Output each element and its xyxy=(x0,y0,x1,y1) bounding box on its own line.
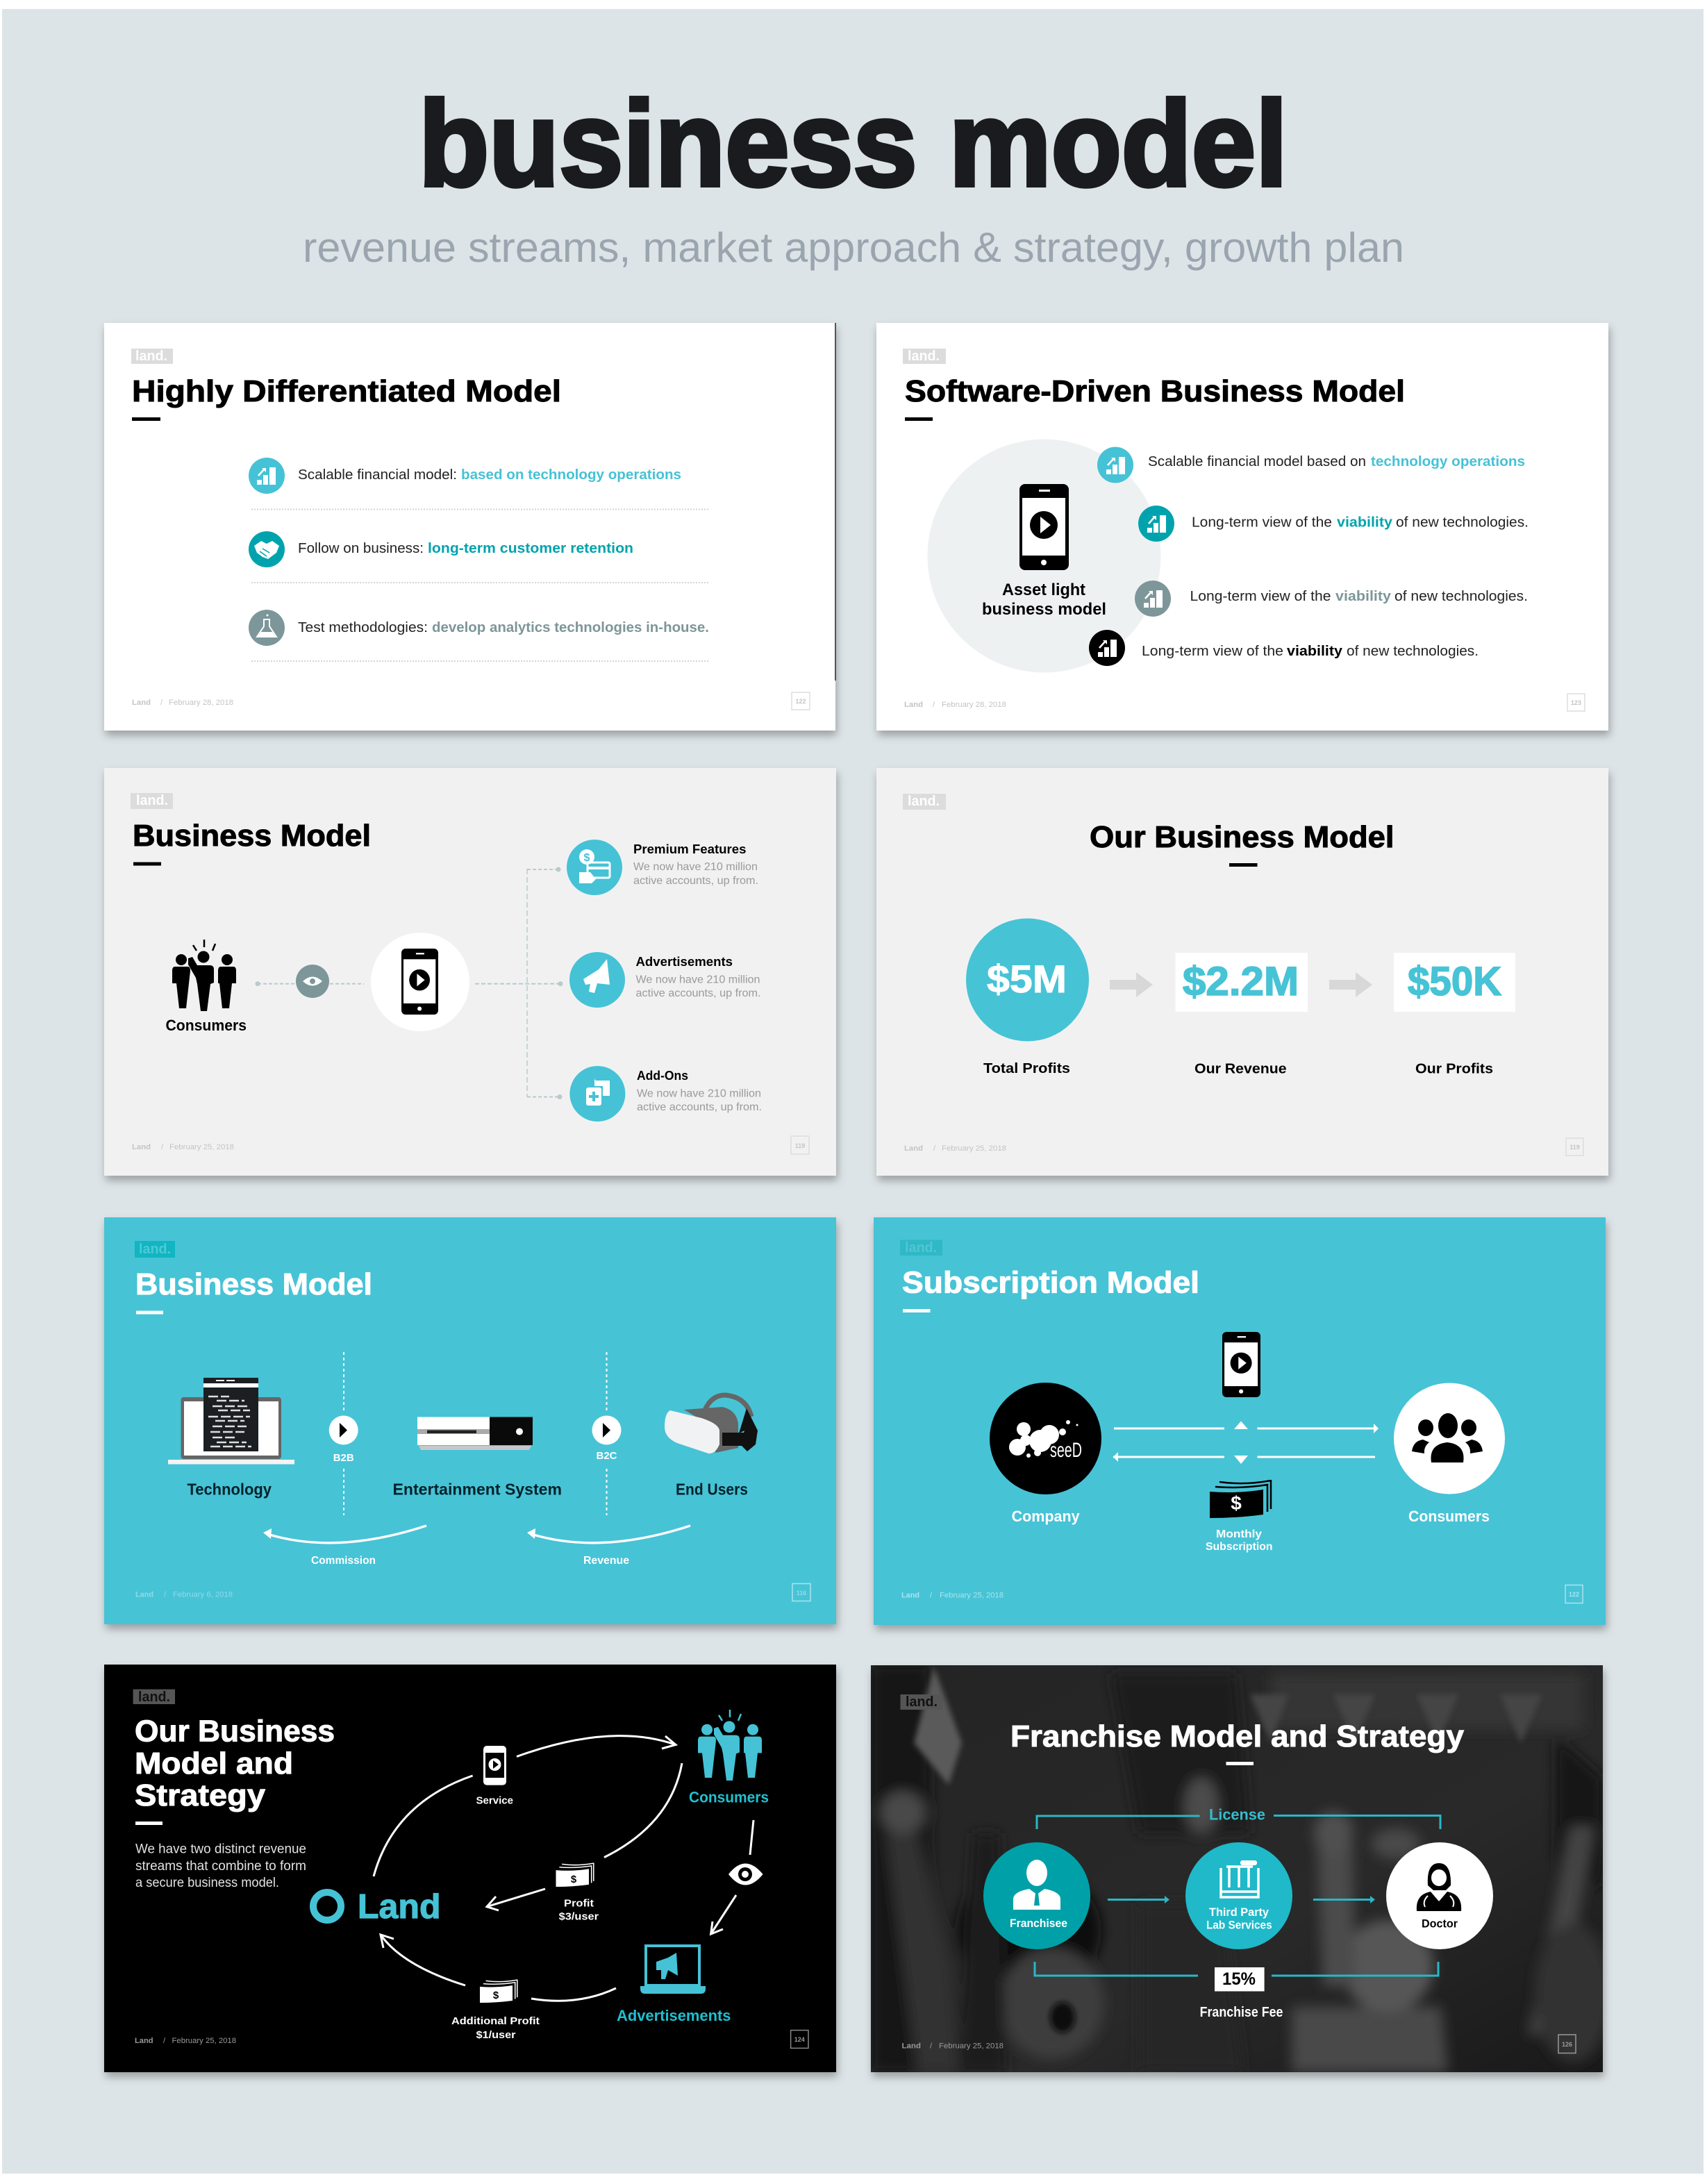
panel: Our Business Model and Strategy xyxy=(104,1665,836,2072)
B2C play: B2C xyxy=(596,1450,617,1462)
heading: Model and xyxy=(135,1747,293,1781)
footer: / xyxy=(164,1590,167,1599)
B2C play xyxy=(592,1415,621,1462)
profit xyxy=(556,1863,599,1923)
panel: Franchise Model and Strategy xyxy=(871,1665,1611,2072)
footer: 126 xyxy=(1562,2041,1572,2048)
profit: Profit xyxy=(564,1898,594,1910)
money icon: $ xyxy=(1231,1492,1242,1514)
add-ons: active accounts, up from. xyxy=(637,1101,762,1113)
item 1: Scalable financial model based on xyxy=(1148,454,1366,469)
arrow 1 xyxy=(1110,972,1153,997)
arrow franchisee to lab xyxy=(1108,1896,1169,1903)
B2B play: B2B xyxy=(333,1452,354,1464)
item 2: viability xyxy=(1337,515,1393,531)
labels: Entertainment System xyxy=(393,1480,562,1498)
heading: Our Business xyxy=(135,1715,335,1749)
consumers: Consumers xyxy=(165,1017,247,1034)
total profits: $5M xyxy=(987,957,1067,1001)
row 3: develop analytics technologies in-house. xyxy=(432,620,709,635)
background photo approximation xyxy=(871,1665,1611,2072)
footer xyxy=(904,1138,1583,1156)
revenue arrow: Revenue xyxy=(583,1555,629,1567)
item 2 xyxy=(1138,506,1529,542)
third party lab: Lab Services xyxy=(1206,1918,1272,1931)
doctor: Doctor xyxy=(1422,1917,1458,1930)
footer xyxy=(132,692,810,710)
Land logo: Land xyxy=(358,1888,440,1926)
consumers teal xyxy=(689,1710,769,1806)
premium features: active accounts, up from. xyxy=(633,875,758,887)
company: seeD xyxy=(1050,1439,1082,1462)
item 3: of new technologies. xyxy=(1394,589,1528,604)
advertisements: We now have 210 million xyxy=(636,974,760,985)
franchise fee label: Franchise Fee xyxy=(1200,2005,1283,2020)
license bracket xyxy=(1037,1806,1440,1829)
logo tag: land. xyxy=(908,794,940,809)
advertisements: Advertisements xyxy=(617,2007,731,2024)
row 1: based on technology operations xyxy=(461,467,681,483)
revenue: $2.2M xyxy=(1183,959,1299,1004)
premium features: We now have 210 million xyxy=(633,861,758,873)
commission arrow: Commission xyxy=(311,1555,376,1567)
footer: / xyxy=(930,1592,933,1600)
heading: Our Business Model xyxy=(1090,820,1394,854)
laptop icon xyxy=(168,1378,294,1464)
monthly subscription xyxy=(1206,1528,1272,1553)
heading: Highly Differentiated Model xyxy=(132,374,561,408)
heading: Business Model xyxy=(135,1267,372,1301)
monthly subscription: Subscription xyxy=(1206,1541,1272,1553)
15 percent box xyxy=(1215,1967,1265,1992)
eye xyxy=(728,1864,763,1885)
footer: February 25, 2018 xyxy=(940,1592,1004,1600)
heading: Franchise Model and Strategy xyxy=(1010,1719,1465,1753)
footer: 122 xyxy=(1569,1591,1579,1598)
row 2: long-term customer retention xyxy=(428,541,633,556)
B2B play xyxy=(329,1415,358,1464)
heading: Software-Driven Business Model xyxy=(905,374,1405,408)
eye icon xyxy=(296,965,329,998)
large circle xyxy=(928,439,1161,672)
footer: 123 xyxy=(1571,699,1581,706)
logo tag: land. xyxy=(139,1242,171,1257)
footer: February 25, 2018 xyxy=(172,2037,236,2045)
footer xyxy=(904,694,1585,711)
consumers teal: Consumers xyxy=(689,1789,769,1806)
dotted dividers xyxy=(344,1352,607,1515)
add-ons xyxy=(569,1066,762,1122)
item 4 xyxy=(1089,630,1479,666)
Land logo xyxy=(313,1888,440,1926)
logo tag: land. xyxy=(905,1240,937,1256)
footer: Land xyxy=(901,2042,921,2050)
logo tag: land. xyxy=(135,349,167,364)
consumers: Consumers xyxy=(1408,1508,1490,1525)
footer: / xyxy=(933,701,935,709)
center label: business model xyxy=(982,600,1106,619)
subtitle: revenue streams, market approach & strategy, growth plan xyxy=(303,224,1404,271)
profits xyxy=(1394,953,1515,1076)
add-ons: We now have 210 million xyxy=(637,1087,761,1100)
row 1: Scalable financial model: xyxy=(298,467,457,483)
row 2: Follow on business: xyxy=(298,541,424,556)
row 1 xyxy=(249,458,681,494)
arrow 2 xyxy=(1329,972,1372,997)
connector lines xyxy=(256,867,563,1099)
additional profit: $1/user xyxy=(476,2029,516,2041)
advertisements xyxy=(617,1946,731,2024)
panel: Business Model light grey xyxy=(104,768,836,1176)
logo tag: land. xyxy=(906,1694,938,1710)
profit: $ xyxy=(571,1874,577,1885)
service phone xyxy=(476,1746,513,1807)
footer: Land xyxy=(135,1590,153,1599)
third party lab: Third Party xyxy=(1209,1906,1269,1919)
footer: Land xyxy=(132,1143,151,1151)
row 3: Test methodologies: xyxy=(298,620,428,635)
title: business model xyxy=(419,76,1288,211)
license bracket: License xyxy=(1209,1806,1265,1823)
15 percent box: 15% xyxy=(1222,1969,1256,1989)
footer: / xyxy=(161,1143,164,1151)
monthly subscription: Monthly xyxy=(1216,1528,1262,1540)
footer: 116 xyxy=(797,1590,806,1597)
item 3: Long-term view of the xyxy=(1190,589,1331,604)
item 3: viability xyxy=(1335,589,1392,604)
footer: February 28, 2018 xyxy=(169,699,233,707)
footer: Land xyxy=(901,1592,919,1600)
phone hub xyxy=(371,933,469,1031)
revenue arrow xyxy=(527,1526,690,1567)
panel: Our Business Model xyxy=(876,768,1608,1176)
footer xyxy=(135,2031,808,2048)
footer: / xyxy=(163,2037,166,2045)
footer xyxy=(901,1585,1583,1603)
body text: streams that combine to form xyxy=(135,1859,306,1874)
footer: February 25, 2018 xyxy=(942,1144,1006,1153)
arrow lab to doctor xyxy=(1313,1896,1375,1903)
heading: Subscription Model xyxy=(902,1265,1199,1299)
item 2: of new technologies. xyxy=(1396,515,1529,531)
footer: Land xyxy=(132,699,151,707)
consumers xyxy=(165,940,247,1034)
footer: / xyxy=(930,2042,933,2050)
body text xyxy=(135,1842,306,1890)
labels xyxy=(188,1480,748,1498)
advertisements xyxy=(569,952,761,1008)
footer xyxy=(135,1583,810,1601)
revenue xyxy=(1175,953,1308,1076)
item 1 xyxy=(1097,447,1525,483)
heading xyxy=(135,1715,335,1812)
panel: Business Model teal xyxy=(104,1217,836,1624)
footer: / xyxy=(933,1144,936,1153)
revenue: Our Revenue xyxy=(1194,1061,1287,1076)
panel: Software-Driven Business Model xyxy=(876,323,1608,731)
footer: 124 xyxy=(794,2036,805,2043)
footer: February 25, 2018 xyxy=(169,1143,234,1151)
center label: Asset light xyxy=(1002,581,1085,599)
row 3 xyxy=(249,610,709,646)
premium features: $ xyxy=(584,852,590,864)
additional profit: $ xyxy=(493,1990,499,2001)
third party lab xyxy=(1185,1842,1292,1949)
total profits: Total Profits xyxy=(983,1061,1070,1076)
body text: We have two distinct revenue xyxy=(135,1842,306,1857)
footer: February 6, 2018 xyxy=(173,1590,233,1599)
consumers xyxy=(1394,1383,1505,1525)
footer: 119 xyxy=(795,1142,805,1149)
franchisee xyxy=(983,1842,1090,1949)
footer: Land xyxy=(904,1144,923,1153)
console icon xyxy=(417,1417,533,1450)
profits: $50K xyxy=(1408,959,1501,1004)
advertisements: active accounts, up from. xyxy=(636,987,761,999)
footer: Land xyxy=(904,701,923,709)
footer xyxy=(132,1136,809,1154)
row 2 xyxy=(249,531,633,567)
heading: Strategy xyxy=(135,1778,266,1812)
service phone: Service xyxy=(476,1794,513,1807)
company: Company xyxy=(1012,1508,1080,1525)
add-ons: Add-Ons xyxy=(637,1069,688,1083)
logo tag: land. xyxy=(136,793,168,808)
profit: $3/user xyxy=(559,1911,599,1923)
commission arrow xyxy=(263,1526,426,1567)
center label xyxy=(982,581,1106,619)
company xyxy=(990,1383,1101,1525)
item 3 xyxy=(1135,581,1528,617)
additional profit: Additional Profit xyxy=(451,2015,540,2027)
VR headset icon xyxy=(665,1395,758,1453)
footer: Land xyxy=(135,2037,153,2045)
premium features: Premium Features xyxy=(633,842,746,856)
footer: February 28, 2018 xyxy=(942,701,1006,709)
footer: 119 xyxy=(1569,1144,1580,1151)
panel: Highly Differentiated Model xyxy=(104,323,835,731)
phone icon xyxy=(1222,1332,1260,1397)
premium features xyxy=(567,840,758,895)
additional profit xyxy=(451,1980,540,2041)
footer: / xyxy=(160,699,163,707)
money icon xyxy=(1210,1481,1271,1518)
labels: Technology xyxy=(188,1480,272,1498)
footer: 122 xyxy=(795,698,806,705)
item 4: Long-term view of the xyxy=(1142,644,1283,659)
profits: Our Profits xyxy=(1415,1061,1493,1076)
fee bracket xyxy=(1035,1962,1438,1976)
item 2: Long-term view of the xyxy=(1192,515,1332,531)
item 4: viability xyxy=(1287,644,1343,659)
labels: End Users xyxy=(676,1480,748,1498)
cycle arrows xyxy=(374,1736,753,2001)
footer: February 25, 2018 xyxy=(939,2042,1004,2050)
logo tag: land. xyxy=(138,1690,170,1705)
panel: Subscription Model xyxy=(874,1217,1606,1625)
body text: a secure business model. xyxy=(135,1876,279,1890)
doctor xyxy=(1386,1842,1493,1949)
logo tag: land. xyxy=(908,349,940,364)
franchisee: Franchisee xyxy=(1010,1917,1067,1930)
item 4: of new technologies. xyxy=(1347,644,1479,659)
advertisements: Advertisements xyxy=(636,955,733,969)
total profits xyxy=(966,918,1089,1076)
arrows xyxy=(1113,1421,1379,1464)
footer xyxy=(901,2035,1576,2053)
heading: Business Model xyxy=(133,819,371,853)
item 1: technology operations xyxy=(1371,454,1525,469)
phone icon xyxy=(1019,484,1069,570)
